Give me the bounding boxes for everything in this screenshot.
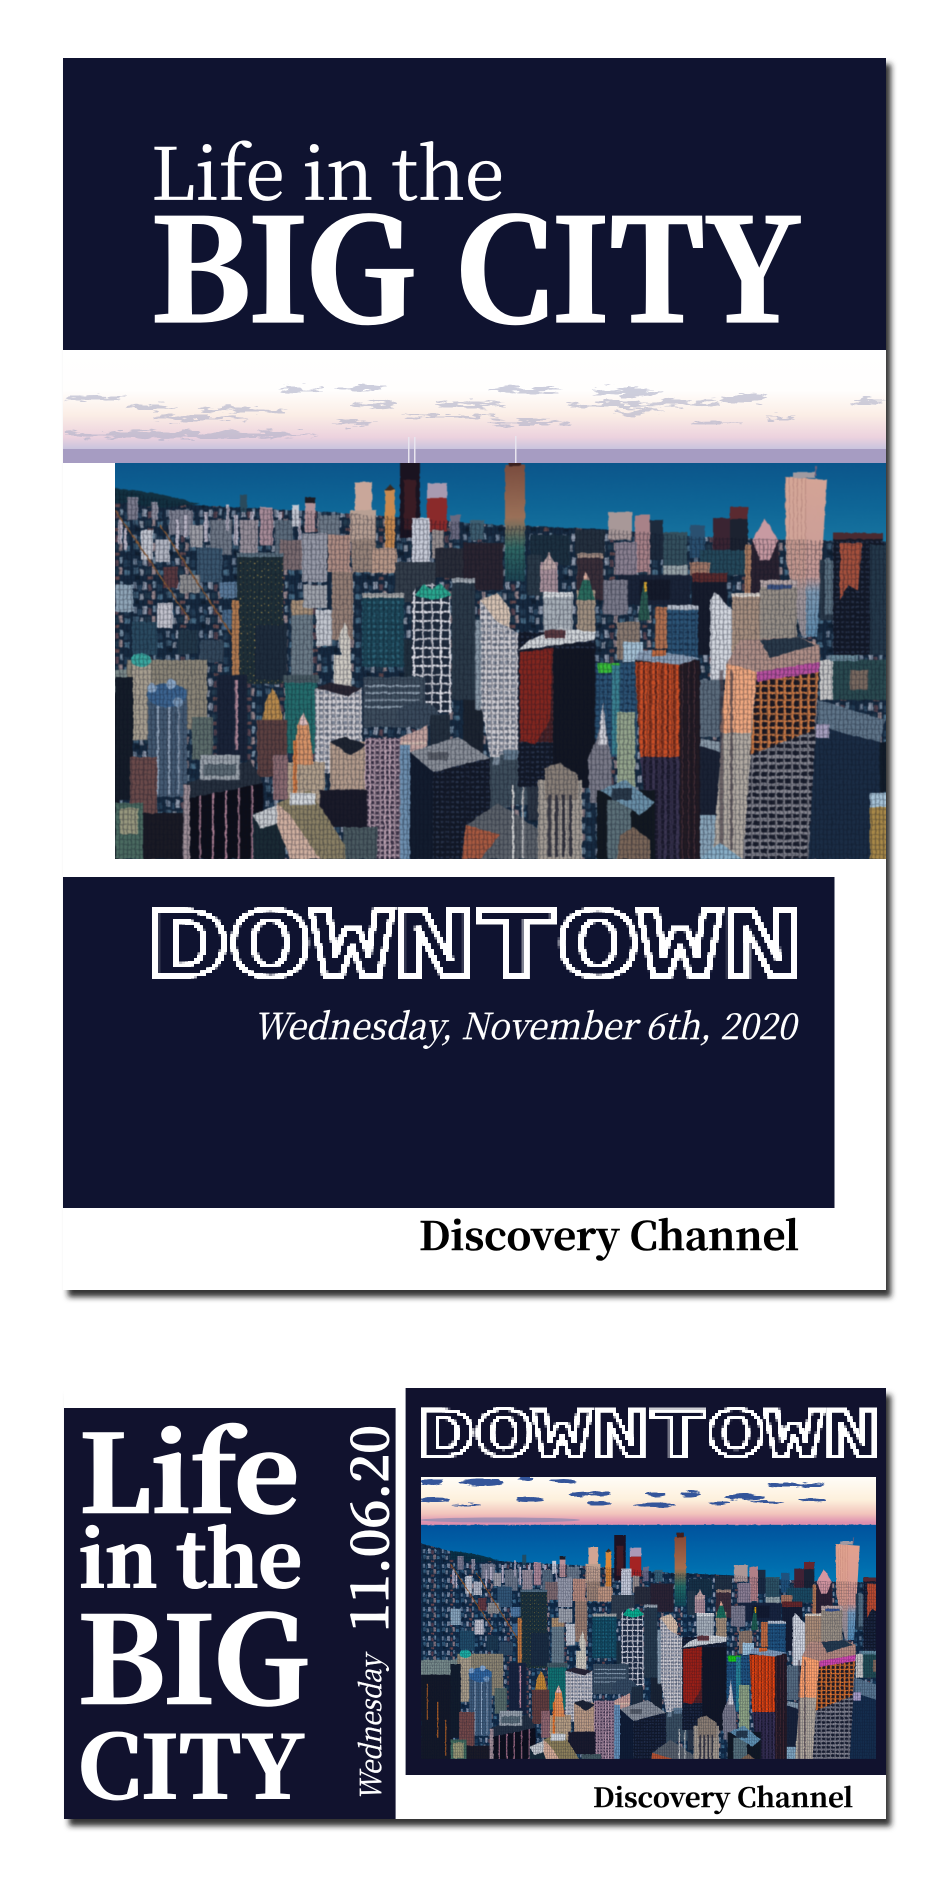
panel: title banner: [63, 58, 886, 362]
photo: aerial city skyline: [115, 463, 886, 859]
panel: tall poster card: [40, 57, 891, 1290]
title word: CITY: CITY: [78, 1699, 304, 1823]
title: Life in the: Life in the: [151, 116, 504, 220]
title: BIG CITY: BIG: [150, 161, 414, 362]
channel name: Discovery Channel: [419, 1206, 799, 1262]
heading: DOWNTOWN: DOWNTOWN: [147, 894, 803, 1007]
channel name small: Discovery Channel: [593, 1778, 853, 1815]
rotated date: 11.06.20: [328, 1425, 403, 1632]
title word: BIG: BIG: [77, 1567, 308, 1738]
sky band with clouds: [63, 384, 886, 463]
photo: city skyline copy: [421, 1477, 876, 1759]
panel: downtown photo block: [406, 1388, 897, 1780]
panel: wide banner card: [64, 1388, 897, 1823]
title words: in the: in the: [79, 1500, 302, 1609]
panel: stacked title column: [64, 1391, 403, 1823]
title word: Life: Life: [79, 1391, 299, 1543]
date line: Wednesday, November 6th, 2020: [253, 999, 800, 1050]
panel: downtown date block: [63, 877, 834, 1208]
title: BIG CITY: CITY: [456, 161, 800, 362]
rotated weekday: Wednesday: [349, 1651, 390, 1801]
heading: DOWNTOWN small: DOWNTOWN: [417, 1399, 881, 1478]
